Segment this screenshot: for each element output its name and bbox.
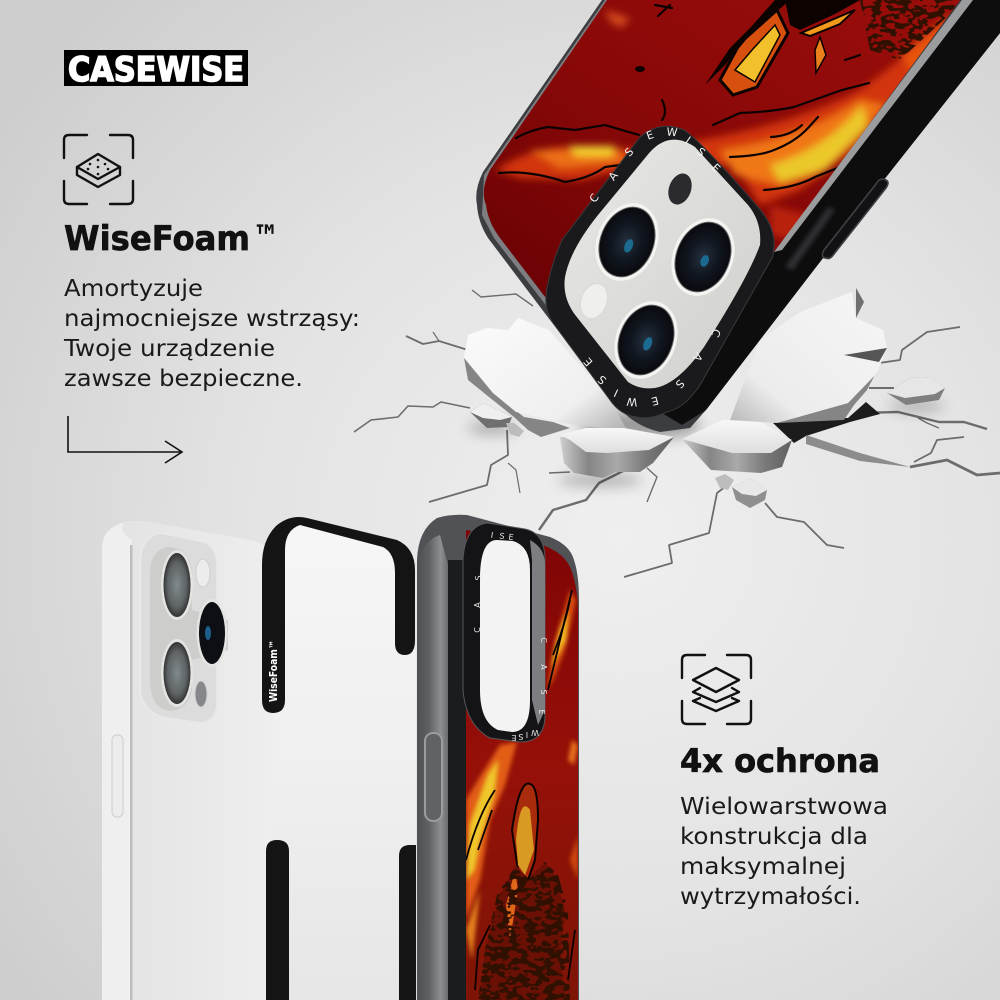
text block: 4x ochrona description: maksymalnej [680,854,846,880]
ring lettering [581,125,723,409]
round right rock [887,377,945,405]
ring lettering: S [474,575,483,581]
creature sketch [720,10,788,95]
ring lettering: W [626,395,638,409]
lens right [660,209,746,305]
ring lettering: E [581,355,595,369]
camera glass [564,140,760,388]
ring lettering: A [690,350,705,364]
lens bottom [603,292,689,388]
side button [425,733,442,821]
front right slab [682,420,792,473]
ring lettering: I [683,134,693,147]
logo: CASEWISE [68,50,244,90]
upper phone with red case [470,0,1000,432]
small left rocks [470,403,524,437]
white phone back [102,521,273,1000]
WiseFoam bottom strip right [399,845,416,1000]
case grey frame [476,0,1000,432]
front left slab [560,428,674,478]
text block: 4x ochrona description: Wielowarstwowa [680,794,888,820]
WiseFoam bottom strip left [266,840,289,1000]
heading: 4x ochrona: 4x ochrona [680,742,880,780]
front camera ring [463,523,548,742]
text block: WiseFoam description: zawsze bezpieczne. [64,366,303,392]
text block: 4x ochrona description: wytrzymałości. [680,884,861,910]
phone side band [102,522,132,1000]
camera plateau [140,533,217,723]
strip label: WiseFoam™ [268,640,280,702]
ring lettering: C [708,327,723,339]
arrow [68,416,182,463]
bumper highlight [785,207,835,270]
lens top-left [584,194,670,290]
shadows around slabs [468,402,944,485]
dark hole under right slab [773,402,880,443]
ring lettering: E [645,128,656,143]
ring lettering: S [499,531,505,541]
ring lettering: I [490,531,494,540]
side button [822,179,888,258]
icon: layers [682,655,751,724]
flash [196,559,210,587]
flame black lines [499,5,869,190]
ring lettering: W [531,728,539,737]
icon: foam [64,135,133,204]
cracks in the wall [354,290,1000,577]
ring lettering: S [622,145,636,159]
ring lettering: S [539,689,548,695]
figure mask [516,806,534,875]
sketch ink on figure [478,862,570,1000]
lens 3 [161,639,193,707]
ring lettering: E [650,393,660,408]
small rocks under front slab [715,474,767,508]
ring lettering: C [473,627,482,633]
window through ring [480,540,530,732]
ring lettering: I [612,386,620,399]
lens 1 [161,550,193,620]
front slabs [560,420,792,508]
heading: WiseFoam: ™ [253,218,279,258]
sensor pale [576,280,612,322]
text block: WiseFoam description: Twoje urządzenie [63,336,275,362]
text block: 4x ochrona description: konstrukcja dla [680,824,868,850]
ring lettering: A [473,602,482,608]
wedge crack [806,435,910,467]
text block: WiseFoam description: Amortyzuje [64,276,203,302]
side button [112,735,123,817]
ring lettering: A [606,169,621,183]
ring lettering: W [666,125,678,139]
illustration: cracked wall impact [354,0,1000,577]
ring lettering: A [539,664,548,670]
ring lettering: E [709,161,723,175]
ring lettering: S [694,145,708,159]
text block: WiseFoam description: najmocniejsze wstrząsy: [64,306,360,332]
flash dark [664,170,696,208]
sensor [195,681,207,707]
silver lens surrounds [150,547,228,711]
ring lettering: I [526,730,528,739]
text block: WiseFoam description [63,276,360,392]
ring lettering: S [673,377,687,391]
case frame [417,515,579,1000]
black case front [417,515,579,1000]
heading: WiseFoam: WiseFoam [64,219,250,259]
right slab [730,288,887,423]
ring lettering: E [511,733,517,742]
ring lettering: S [518,732,524,741]
red artwork [466,530,579,1000]
left slab [464,318,630,437]
text block: 4x ochrona description [680,794,888,910]
right side bumper black [640,0,1000,425]
WiseFoam top strip [262,517,415,713]
ring lettering: C [587,191,602,205]
lens 2 [196,599,228,667]
ring lettering: E [508,532,514,542]
red artwork [484,0,960,298]
camera ring [546,125,774,418]
ring lettering: C [539,637,548,643]
ring lettering [473,531,548,742]
figure hood [512,783,538,880]
ring lettering: S [595,372,609,387]
black smear marks [860,0,956,59]
figure body [480,862,566,1000]
white inner panel of foam frame [273,525,416,1000]
ring lettering: E [537,709,546,715]
